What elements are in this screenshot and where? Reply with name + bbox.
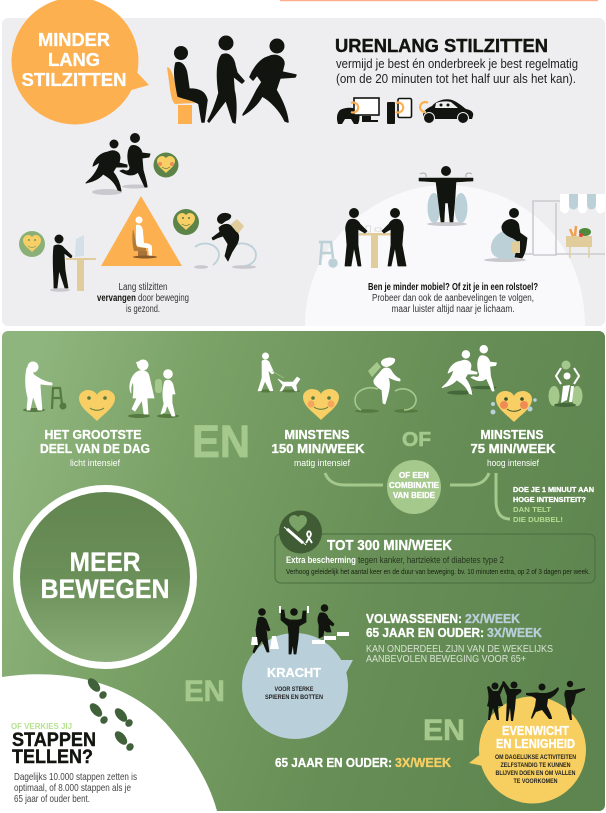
stappen tellen text: OF VERKIES JIJ [11, 722, 72, 731]
callout: doe je 1 minuut: DOE JE 1 MINUUT AAN [513, 485, 594, 494]
circle: combinatie: COMBINATIE [389, 481, 440, 490]
speech bubble: evenwicht en lenigheid: EN LENIGHEID [496, 737, 575, 751]
box: tot 300 min/week: TOT 300 MIN/WEEK [327, 537, 452, 554]
circle: combinatie: OF EEN [399, 471, 429, 480]
speech bubble: minder lang stilzitten: MINDER [38, 30, 110, 50]
icon: white cyclist [355, 358, 418, 413]
stappen tellen text: STAPPEN [12, 730, 96, 751]
icon: triangle with seated person [101, 196, 182, 266]
top accent line [280, 0, 598, 1]
speech bubble: evenwicht en lenigheid: BLIJVEN DOEN EN OM VALLEN [496, 770, 576, 777]
callout: doe je 1 minuut [513, 485, 594, 524]
text: ben je minder mobiel [368, 282, 538, 315]
text: lang stilzitten: vervangen door beweging [97, 293, 189, 304]
circle: combinatie [387, 460, 441, 514]
text: 65 jaar en ouder: 3X/WEEK [395, 756, 451, 770]
icon: person walking dog [258, 352, 300, 392]
white corner: stappen tellen [2, 674, 217, 811]
box: tot 300 min/week: Extra bescherming tegen kanker, hartziekte of diabetes type 2 [286, 555, 504, 566]
heading: minstens 75: hoog intensief [487, 458, 539, 469]
icon: cyclist [194, 213, 256, 269]
icon: happy heart badge [173, 209, 199, 235]
icon: runners with shadows [86, 133, 150, 195]
text: vermijd: vermijd je best én onderbreek je best regelmatig [336, 56, 578, 71]
icons: screens and car [337, 98, 473, 124]
speech bubble: evenwicht en lenigheid: TE VOORKOMEN [514, 778, 558, 785]
heading: minstens 75: 75 MIN/WEEK [470, 442, 556, 456]
text: ben je minder mobiel: Probeer dan ook de aanbevelingen te volgen, [372, 293, 534, 304]
stappen tellen text: 65 jaar of ouder bent. [14, 793, 90, 805]
icon: blushing heart [303, 389, 339, 420]
icon: sweating heart [490, 391, 537, 422]
icon: heart syringe ribbon badge [279, 510, 322, 554]
text: lang stilzitten: is gezond. [126, 304, 160, 315]
callout: doe je 1 minuut: DIE DUBBEL! [513, 515, 563, 524]
text: volwassenen 2x/week: 65 JAAR EN OUDER: [366, 626, 484, 640]
text: volwassenen 2x/week: 3X/WEEK [487, 626, 542, 640]
circle: meer bewegen [16, 488, 194, 666]
text: kan onderdeel zijn: KAN ONDERDEEL ZIJN VAN DE WEKELIJKS [366, 644, 553, 655]
callout: doe je 1 minuut: HOGE INTENSITEIT? [513, 495, 586, 504]
panel background [2, 331, 605, 811]
heading: het grootste deel van de dag: licht intensief [70, 458, 120, 469]
callout: doe je 1 minuut: DAN TELT [513, 505, 551, 514]
text: lang stilzitten [97, 282, 189, 315]
speech bubble: minder lang stilzitten: LANG [48, 50, 100, 70]
heading: minstens 150: MINSTENS [284, 428, 350, 442]
speech bubble: kracht [242, 633, 353, 739]
text: lang stilzitten: Lang stilzitten [118, 282, 168, 293]
icon: balance figures [487, 681, 585, 721]
box: tot 300 min/week [275, 510, 595, 583]
speech bubble: kracht: SPIEREN EN BOTTEN [265, 694, 323, 701]
icon: two people at a table [345, 208, 406, 268]
circle: meer bewegen: MEER [70, 547, 140, 577]
icon: person at standing desk [50, 234, 96, 292]
speech bubble: minder lang stilzitten: STILZITTEN [22, 70, 126, 90]
speech bubble: evenwicht en lenigheid: OM DAGELIJKSE ACTIVITEITEN [495, 754, 576, 761]
icon: walker frame [319, 242, 336, 266]
speech bubble: minder lang stilzitten [12, 0, 149, 124]
label: en 3: EN [423, 714, 465, 747]
text: volwassenen 2x/week: VOLWASSENEN: [366, 612, 462, 626]
label: of: OF [402, 429, 431, 451]
icon: sit, stand, walk figures [167, 36, 296, 124]
text: volwassenen 2x/week [366, 612, 542, 640]
icon: woman and child [128, 360, 179, 418]
stappen tellen text: Dagelijks 10.000 stappen zetten is [14, 771, 137, 783]
text: kan onderdeel zijn [366, 644, 553, 665]
heading: minstens 75: MINSTENS [480, 428, 544, 442]
icon: footprints [85, 676, 135, 752]
panel: minder lang stilzitten [2, 0, 605, 326]
text: vermijd [336, 56, 578, 86]
icon: elderly with walker [23, 362, 66, 412]
heading: urenlang stilzitten: URENLANG STILZITTEN [335, 36, 548, 56]
icon: person with ball and bag [484, 208, 527, 262]
heading: minstens 150: matig intensief [294, 458, 350, 469]
icon: heart with smile, light [79, 390, 115, 421]
panel: meer bewegen [2, 331, 605, 811]
heading: het grootste deel van de dag: DEEL VAN DE DAG [40, 442, 150, 456]
heading: het grootste deel van de dag: HET GROOTSTE [44, 428, 142, 442]
circle: combinatie: VAN BEIDE [393, 491, 436, 500]
icon: seated arm exercise [419, 166, 473, 226]
text: volwassenen 2x/week: 2X/WEEK [465, 612, 520, 626]
circle: meer bewegen: BEWEGEN [40, 574, 170, 604]
speech bubble: kracht: VOOR STERKE [274, 686, 314, 693]
stappen tellen text [11, 722, 137, 805]
text: vermijd: (om de 20 minuten tot het half uur als het kan). [336, 71, 576, 86]
icon: market stall [525, 194, 605, 258]
speech bubble: evenwicht en lenigheid [469, 696, 586, 804]
panel background [2, 18, 605, 326]
heading: minstens 75 [470, 428, 556, 469]
icon: sweaty heart badge [154, 152, 178, 178]
heading: minstens 150: 150 MIN/WEEK [272, 442, 364, 456]
speech bubble: evenwicht en lenigheid: ZELFSTANDIG TE KUNNEN [500, 762, 571, 769]
icon: strength figures [251, 604, 349, 654]
heading: het grootste deel van de dag [40, 428, 150, 469]
speech bubble: evenwicht en lenigheid: EVENWICHT [502, 724, 569, 738]
stappen tellen text: optimaal, of 8.000 stappen als je [14, 782, 131, 794]
text: 65 jaar en ouder: 65 JAAR EN OUDER: [275, 756, 392, 770]
text: kan onderdeel zijn: AANBEVOLEN BEWEGING VOOR 65+ [366, 654, 526, 665]
white dome [305, 185, 585, 326]
heading: minstens 150 [272, 428, 364, 469]
icon: white runners [442, 345, 496, 395]
icon: wheelchair exercise [548, 360, 582, 407]
stappen tellen text: TELLEN? [12, 747, 93, 768]
icon: light heart badge [19, 231, 45, 257]
text: ben je minder mobiel: maar luister altijd naar je lichaam. [392, 304, 514, 315]
label: en 1: EN [192, 416, 250, 467]
speech bubble: kracht: KRACHT [267, 665, 321, 680]
label: en 2: EN [184, 675, 225, 708]
text: ben je minder mobiel: Ben je minder mobiel? Of zit je in een rolstoel? [368, 282, 538, 293]
connector lines [325, 473, 510, 519]
